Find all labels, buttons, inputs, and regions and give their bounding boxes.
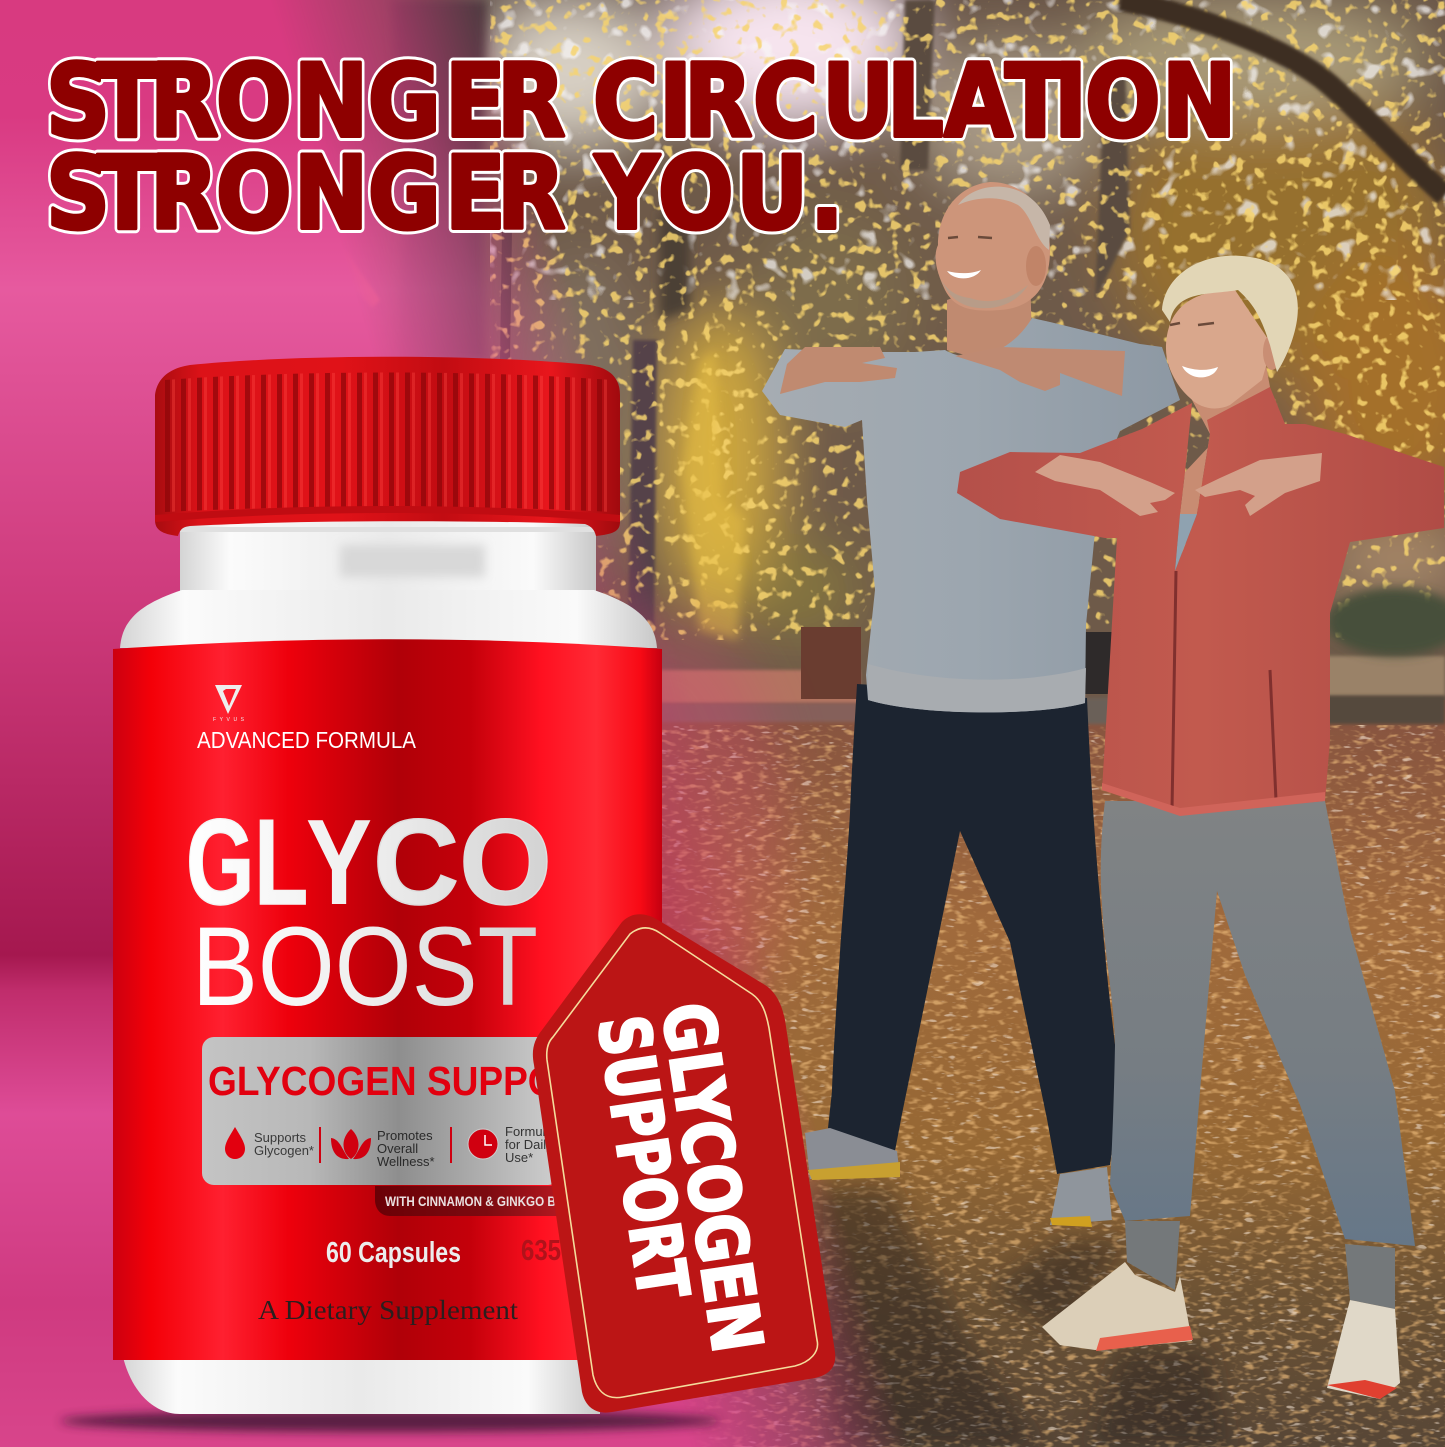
man head and neck: [936, 182, 1050, 362]
ingredients bar: [375, 1186, 592, 1216]
woman right hand: [1195, 453, 1322, 516]
man figure: [762, 182, 1180, 1227]
jacket zip and seams: [1172, 571, 1276, 810]
big overhead branch: [1120, 0, 1445, 195]
supports glycogen text: Glycogen*: [254, 1143, 314, 1158]
leaf litter texture: [640, 725, 1445, 1447]
woman jacket: [957, 387, 1444, 815]
headline fill: STRONGER: [46, 44, 565, 160]
man stubble: [941, 280, 1028, 308]
supports glycogen text: Supports: [254, 1130, 307, 1145]
tag stitched outline: [547, 928, 818, 1398]
headline outline: [46, 44, 1236, 252]
man hair: [958, 187, 1050, 250]
headline fill: YOU.: [594, 136, 844, 252]
bottle neck: [180, 520, 596, 600]
headline outline: YOU.: [594, 136, 844, 252]
orange leaves near left trunk: [322, 235, 380, 308]
glyco wordmark: GL: [186, 794, 308, 930]
bottle shadow: [60, 1410, 720, 1432]
daily use text: Use*: [505, 1150, 533, 1165]
woman trousers: [1101, 801, 1415, 1246]
man left shoe: [805, 1128, 900, 1180]
ingredients bar: WITH CINNAMON & GINKGO BILOBA: [385, 1193, 592, 1209]
sky gaps: [490, 0, 1445, 300]
panel dividers: [320, 1127, 451, 1163]
woman smile: [1182, 366, 1218, 377]
man eyes: [948, 237, 992, 238]
man sweatshirt: [762, 318, 1180, 712]
headline outline: STRONGER: [46, 136, 565, 252]
tag line: support: SUPPORT: [581, 1010, 704, 1305]
man left forearm and hand: [780, 347, 897, 394]
bottle label: [113, 639, 662, 1360]
woman shirt: [1175, 514, 1197, 571]
path curb: [660, 696, 1445, 724]
advanced formula text: ADVANCED FORMULA: [197, 727, 417, 753]
product bottle: [113, 357, 662, 1414]
dark tree trunks and branches: [390, 0, 1130, 630]
woman ankles: [1125, 1221, 1395, 1309]
bottle shoulder: [120, 590, 657, 648]
man waistband: [868, 664, 1086, 712]
batch number: 635: [521, 1235, 561, 1267]
pink gradient overlay: [0, 0, 899, 1447]
tag line: glycogen: GLYCOGEN: [645, 997, 778, 1358]
panel heading: GLYCOGEN SUPPORT: [208, 1058, 606, 1104]
capsule count: 60 Capsules: [326, 1237, 461, 1269]
icon: lotus: [331, 1129, 371, 1159]
woman right shoe: [1327, 1300, 1400, 1399]
yellow sapling: [682, 350, 745, 640]
bin: [801, 627, 861, 699]
tag body: [533, 914, 835, 1413]
bottle base: [120, 1340, 600, 1414]
brand logo: [213, 685, 245, 723]
woman left shoe: [1042, 1262, 1193, 1351]
woman neck and head: [1162, 256, 1298, 514]
headline outline: STRONGER: [46, 44, 565, 160]
headline fill: CIRCULATION: [593, 44, 1236, 160]
man ear: [1026, 246, 1046, 286]
yellow foliage texture: [490, 0, 1445, 640]
dietary supplement text: A Dietary Supplement: [258, 1295, 519, 1325]
glyco wordmark: [186, 794, 552, 930]
icon: blood drop: [225, 1127, 245, 1159]
woman ear: [1263, 334, 1281, 370]
man trousers: [828, 684, 1120, 1174]
ground: [640, 700, 1445, 1447]
glycogen support tag: [533, 914, 835, 1413]
headline fill: [46, 44, 1236, 252]
promotes wellness text: Promotes: [377, 1128, 433, 1143]
woman hair: [1162, 256, 1298, 372]
headline: [46, 44, 1236, 252]
daily use text: Formula: [505, 1124, 553, 1139]
glyco wordmark: Y: [306, 794, 372, 930]
promotes wellness text: Overall: [377, 1141, 418, 1156]
glyco wordmark: CO: [373, 794, 552, 930]
park bench: [1085, 632, 1115, 694]
woman figure: [957, 256, 1444, 1399]
woman eyes: [1170, 323, 1214, 325]
promotes wellness text: Wellness*: [377, 1154, 435, 1169]
blurred tree canopy: [480, 0, 1445, 740]
daily use text: for Daily: [505, 1137, 553, 1152]
cast shadows on ground: [810, 1185, 1230, 1447]
man smile: [947, 270, 981, 278]
grey benefits panel: [202, 1037, 606, 1185]
pink tint on ground: [560, 620, 780, 1060]
bottle cap: [155, 357, 620, 536]
headline fill: STRONGER: [46, 136, 565, 252]
boost wordmark: BOOST: [192, 904, 538, 1029]
brand logo: FYVUS: [213, 717, 245, 723]
man right shoe: [1050, 1167, 1112, 1227]
man right forearm and hand: [955, 347, 1125, 396]
jacket hem: [1102, 783, 1325, 816]
icon: clock: [468, 1129, 498, 1159]
hedge: [1327, 588, 1445, 656]
headline outline: CIRCULATION: [593, 44, 1236, 160]
woman left hand: [1035, 455, 1175, 516]
